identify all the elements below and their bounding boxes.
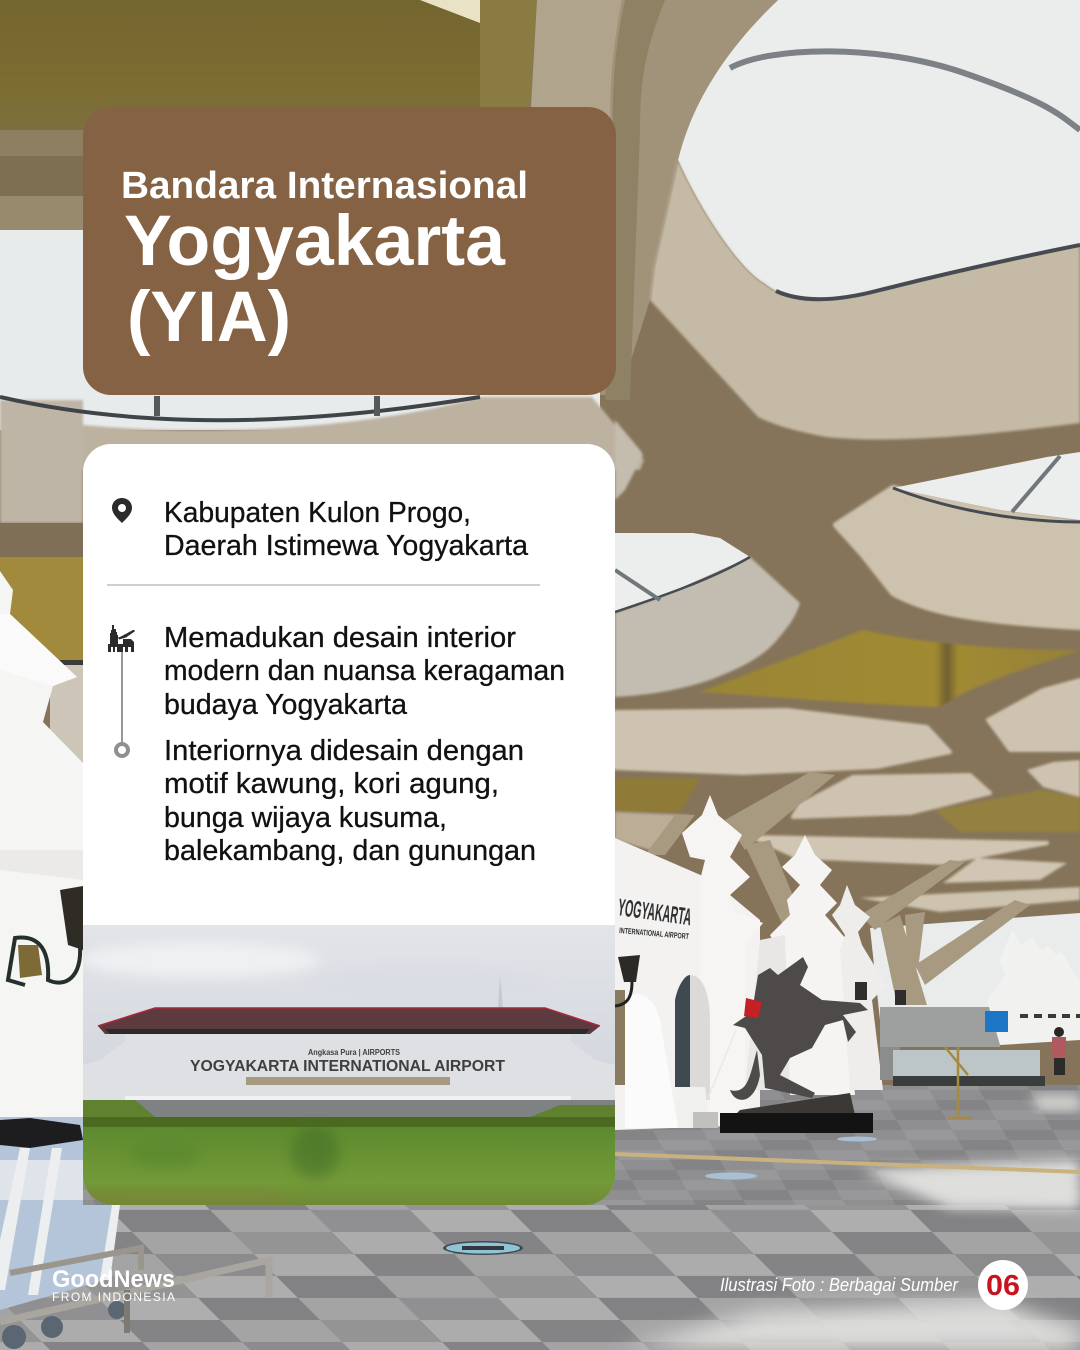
- title panel: [83, 107, 616, 395]
- horse statue: [693, 957, 873, 1133]
- interior motif text: balekambang, dan gunungan: [164, 835, 536, 867]
- logo: GoodNews from Indonesia: FROM INDONESIA: [52, 1290, 175, 1304]
- panel: airport information card: [83, 444, 615, 925]
- design description text: [164, 622, 565, 721]
- photo credit: Ilustrasi Foto : Berbagai Sumber: [720, 1275, 959, 1295]
- location text: Kabupaten Kulon Progo,: [164, 497, 471, 529]
- main concrete panels: [0, 160, 1080, 912]
- location text: [164, 497, 529, 562]
- title line: Bandara Internasional: Bandara Internasional: [121, 165, 528, 207]
- timeline connector: [116, 652, 128, 756]
- gate sign text: Angkasa Pura | AIRPORTS: [308, 1048, 401, 1057]
- design description text: modern dan nuansa keragaman: [164, 655, 565, 687]
- logo: GoodNews from Indonesia: GoodNews: [52, 1266, 175, 1293]
- luggage trolleys: [0, 1117, 269, 1349]
- interior motif text: Interiornya didesain dengan: [164, 735, 524, 767]
- interior motif text: bunga wijaya kusuma,: [164, 802, 447, 834]
- title line: Yogyakarta: Yogyakarta: [124, 202, 506, 281]
- interior motif text: motif kawung, kori agung,: [164, 768, 499, 800]
- white building on the right: YOGYAKARTA: [616, 894, 693, 931]
- white building on the right: INTERNATIONAL AIRPORT: [619, 926, 689, 941]
- design description text: Memadukan desain interior: [164, 622, 516, 654]
- inset photo: airport gate sign: [80, 925, 615, 1205]
- location text: Daerah Istimewa Yogyakarta: [164, 530, 529, 562]
- gate sign text: [190, 1048, 505, 1085]
- white tower on the left: [0, 523, 83, 1117]
- page number badge: [978, 1260, 1028, 1310]
- sky openings: [0, 0, 1080, 430]
- fence, trolleys and towers on the right: [855, 930, 1080, 1118]
- structural struts: [645, 772, 1030, 1005]
- white building on the right: [615, 795, 887, 1130]
- sky windows: [615, 452, 1080, 1020]
- roof rails and struts: [0, 51, 1080, 612]
- plaza floor: [0, 1085, 1080, 1350]
- gate sign text: YOGYAKARTA INTERNATIONAL AIRPORT: [190, 1058, 505, 1075]
- title line: (YIA): (YIA): [127, 278, 291, 357]
- interior motif text: [164, 735, 536, 867]
- page number badge: 06: [986, 1270, 1020, 1302]
- design description text: budaya Yogyakarta: [164, 689, 408, 721]
- upper left ceiling: [0, 0, 778, 400]
- icon: location pin: [112, 498, 132, 523]
- icon: airport tower and plane: [108, 625, 135, 652]
